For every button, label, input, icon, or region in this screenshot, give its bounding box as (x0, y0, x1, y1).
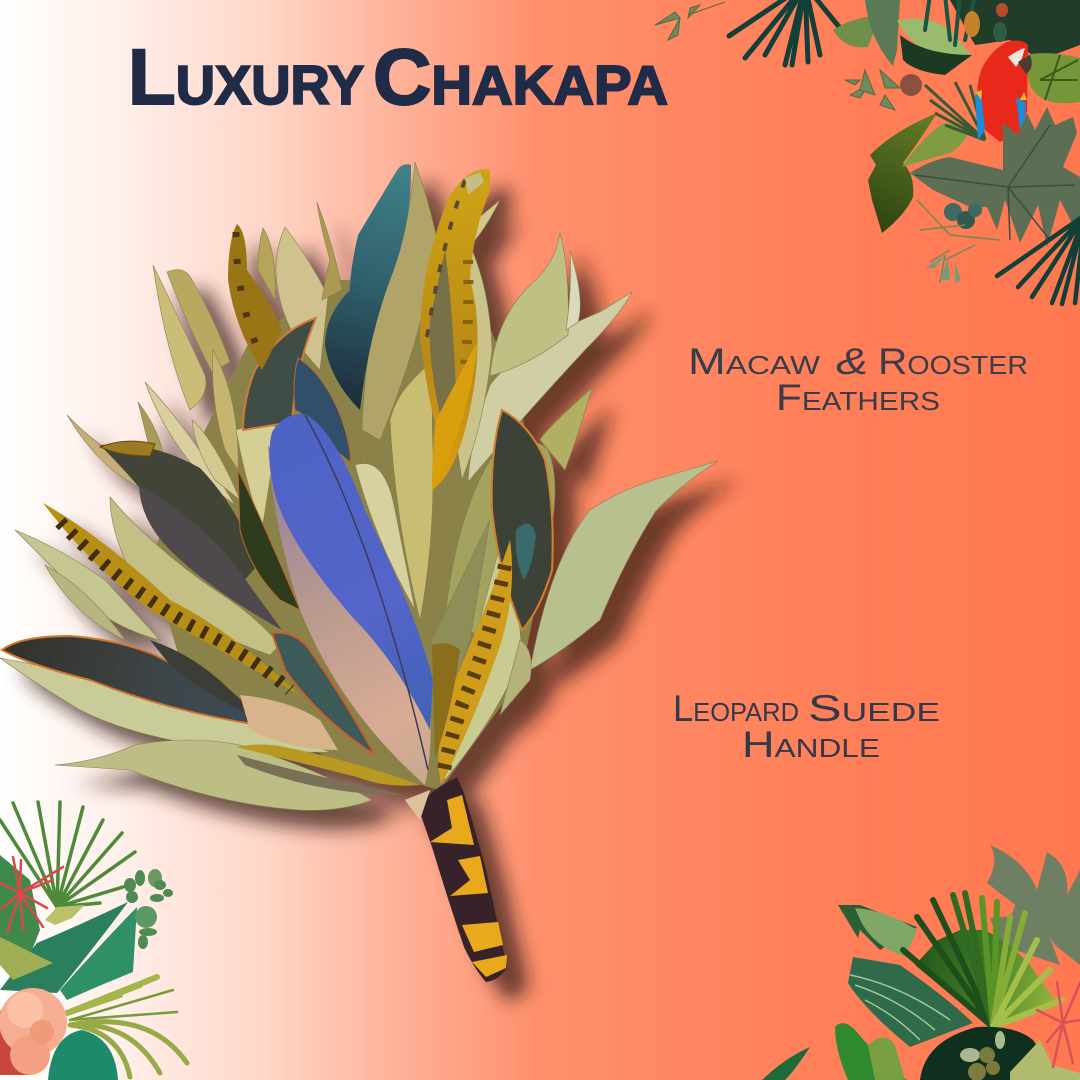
upper palm strands (925, 0, 975, 45)
peach flower (0, 988, 67, 1075)
foliage: top right (655, 0, 1080, 304)
palm fronds lower (997, 215, 1080, 304)
light palm leaf (902, 123, 970, 167)
orange blooms (964, 3, 1008, 42)
big green leaves (0, 902, 137, 1000)
chakapa fan (0, 162, 718, 982)
label: handle (673, 688, 940, 765)
gold rooster feathers (43, 169, 512, 795)
light leaf and fern (833, 15, 880, 47)
grey monstera (987, 845, 1080, 965)
teal blossom cluster (917, 200, 1000, 283)
pointed leaf (762, 1047, 810, 1080)
label: feathers: Macaw (688, 341, 821, 382)
red bromeliad (0, 857, 63, 933)
dark canopy (950, 0, 1080, 60)
fruits (960, 1031, 1005, 1080)
dark iridescent feathers (2, 164, 553, 755)
striped fan (848, 957, 973, 1047)
round teal fan (48, 1030, 118, 1080)
seed head (900, 74, 922, 96)
title: Luxury (128, 32, 364, 121)
monstera bright (1023, 53, 1080, 103)
foliage: bottom left (0, 802, 187, 1080)
side twigs (655, 2, 900, 110)
label: handle: Handle (742, 724, 880, 765)
palm fan (903, 893, 1062, 1030)
label: feathers: Feathers (776, 377, 940, 418)
fern leaf (868, 113, 937, 233)
striped frond (925, 82, 985, 140)
grey-green monstera (910, 107, 1080, 247)
pale fan (1010, 1040, 1080, 1080)
small leaf cluster (124, 869, 173, 949)
label: feathers: & (836, 341, 868, 382)
macaw parrot (975, 41, 1032, 146)
label: feathers: Rooster (878, 341, 1028, 382)
red bromeliad (1037, 982, 1080, 1067)
curled leaf (868, 1038, 905, 1080)
small fan (0, 937, 53, 980)
base mass (150, 280, 545, 790)
label: handle: Suede (808, 688, 940, 729)
dark bowl (920, 1027, 1060, 1080)
pale leaves back (0, 162, 718, 810)
leopard suede handle (405, 777, 507, 982)
label: handle: Leopard (673, 688, 799, 729)
title: Chakapa (373, 32, 668, 121)
foliage: bottom right (762, 845, 1080, 1080)
title (128, 32, 668, 121)
banana leaf (835, 1023, 907, 1080)
palm fronds top (729, 0, 840, 65)
label: feathers (688, 341, 1028, 418)
palm fan (0, 802, 135, 907)
lower palm frond (67, 977, 187, 1077)
light leaf (838, 905, 917, 957)
broad leaf (897, 19, 972, 60)
macaw blue feather (268, 414, 433, 785)
background bush (0, 855, 40, 960)
